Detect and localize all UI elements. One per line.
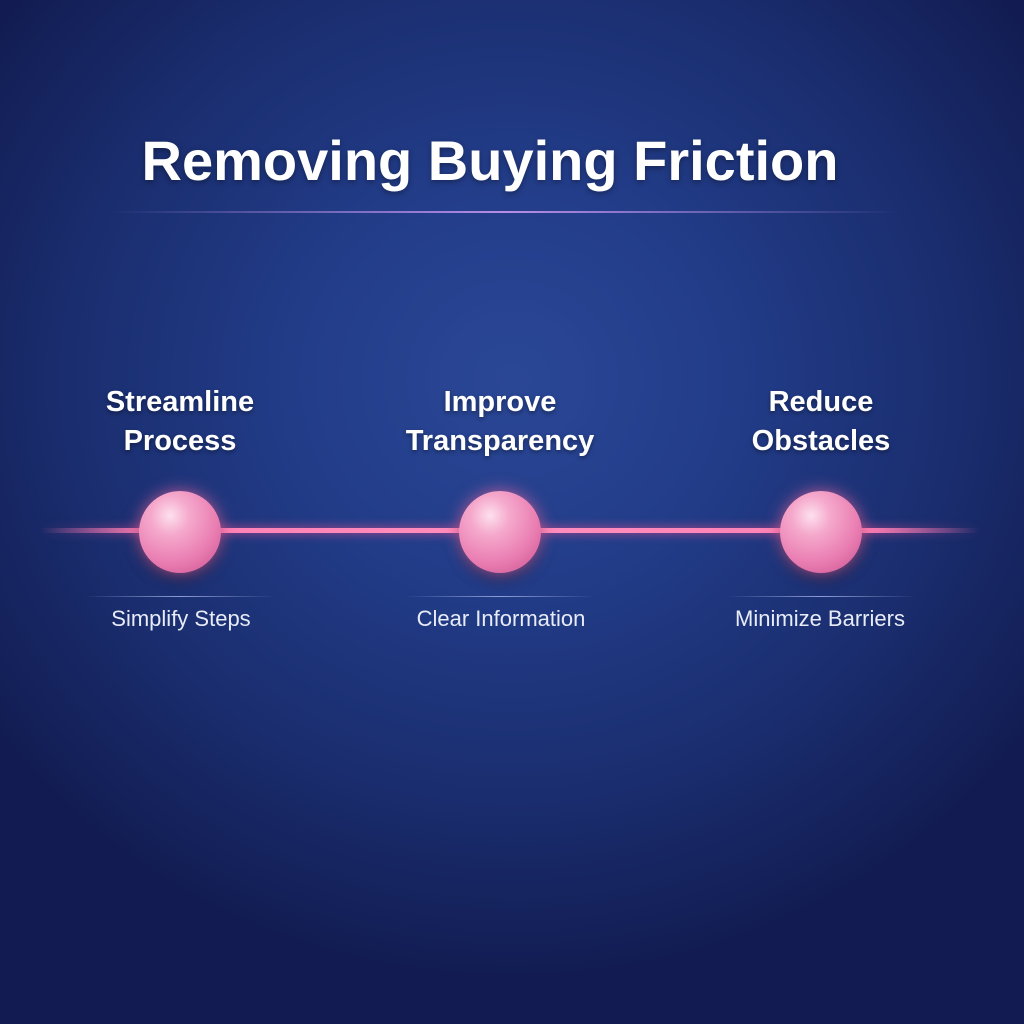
step 3 heading: Obstacles (752, 425, 890, 457)
step 3 heading (751, 386, 890, 457)
timeline line (40, 528, 980, 533)
step 3 subtitle: Minimize Barriers (735, 606, 905, 631)
step 1 heading (106, 386, 254, 457)
step 2 sphere (459, 491, 541, 573)
step 2 heading: Transparency (406, 425, 594, 457)
step 2 subtitle: Clear Information (417, 606, 585, 631)
step 3 sphere (780, 491, 862, 573)
step 2 heading: Improve (444, 386, 556, 418)
title: Removing Buying Friction (142, 129, 838, 192)
step 3 heading: Reduce (769, 386, 873, 418)
step 1 heading: Process (124, 425, 236, 457)
step 1 heading: Streamline (106, 386, 254, 418)
step 2 heading (404, 386, 595, 460)
step 1 sphere (139, 491, 221, 573)
step 1 subtitle: Simplify Steps (111, 606, 251, 631)
